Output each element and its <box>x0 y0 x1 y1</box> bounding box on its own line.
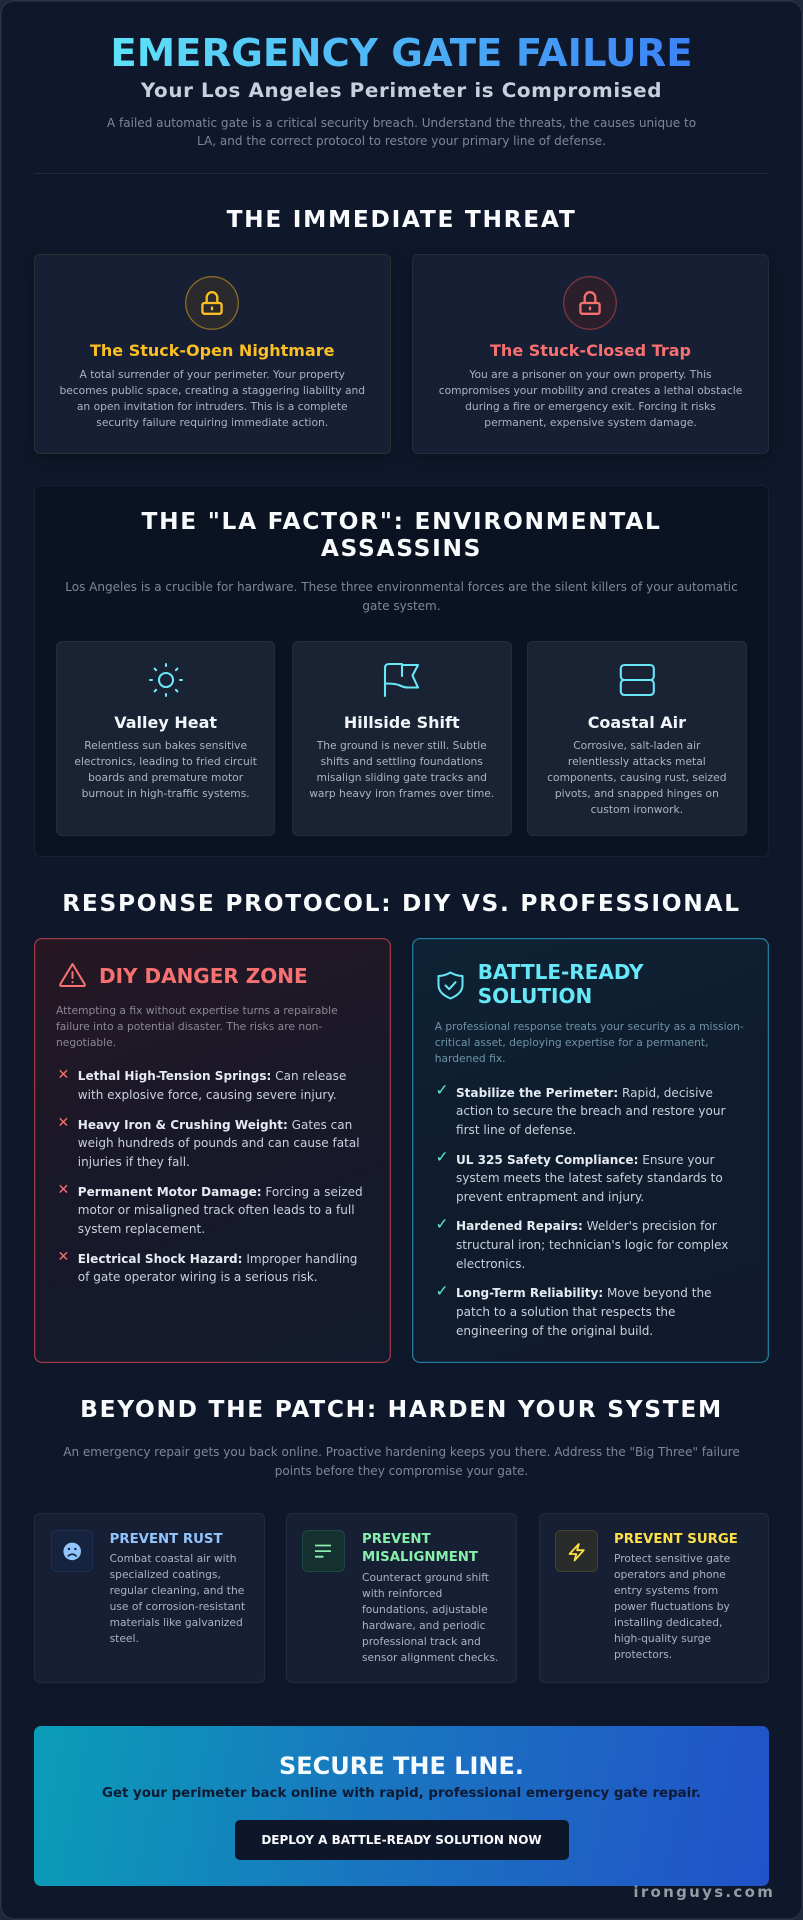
solution: stabilize: first line of defense. <box>456 1123 576 1137</box>
card body: becomes public space, creating a staggering liability and <box>59 384 365 397</box>
card body: materials like galvanized <box>110 1616 243 1629</box>
panel: call to action <box>34 1726 769 1886</box>
solution list: ✓ <box>436 1282 448 1300</box>
card body: relentlessly attacks metal <box>568 755 706 768</box>
card body <box>362 1571 498 1664</box>
section intro: An emergency repair gets you back online. Proactive hardening keeps you there. Address the "Big Three" failure <box>63 1445 740 1459</box>
card body: You are a prisoner on your own property. This <box>469 368 712 381</box>
heading: THE "LA FACTOR": ENVIRONMENTAL <box>141 508 662 535</box>
risk: motor: Permanent Motor Damage: Forcing a seized <box>78 1184 363 1198</box>
solution: reliability: Long-Term Reliability: Move beyond the <box>456 1286 712 1300</box>
section intro <box>63 1445 740 1478</box>
panel intro: negotiable. <box>56 1036 116 1049</box>
card body <box>309 739 494 800</box>
card body: regular cleaning, and the <box>110 1584 244 1597</box>
card title: The Stuck-Closed Trap <box>490 341 691 360</box>
icon: sun <box>149 663 183 697</box>
panel intro <box>56 1004 338 1049</box>
card body: foundations, adjustable <box>362 1603 488 1616</box>
panel intro: critical asset, deploying expertise for a permanent, <box>435 1036 708 1049</box>
card: coastal air <box>527 641 747 836</box>
card title: The Stuck-Open Nightmare <box>90 341 334 360</box>
card: valley heat <box>56 641 275 836</box>
subtitle: Your Los Angeles Perimeter is Compromised <box>141 79 662 102</box>
solution: ul 325 <box>456 1153 723 1204</box>
card body: during a fire or emergency exit. Forcing it risks <box>465 400 716 413</box>
section intro <box>65 580 738 613</box>
card body: protectors. <box>614 1648 672 1661</box>
risk list: ✕ <box>58 1182 69 1198</box>
card body: permanent, expensive system damage. <box>484 416 697 429</box>
solution: reliability: engineering of the original build. <box>456 1324 653 1338</box>
card body: Relentless sun bakes sensitive <box>84 739 247 752</box>
icon: frown face <box>51 1530 93 1572</box>
panel: stuck-open <box>34 254 390 454</box>
card body: burnout in high-traffic systems. <box>82 787 250 800</box>
card body: A total surrender of your perimeter. Your property <box>79 368 345 381</box>
panel: stuck-closed <box>412 254 769 454</box>
card: prevent misalignment <box>286 1513 517 1683</box>
risk list: ✕ <box>58 1067 69 1083</box>
watermark: ironguys.com <box>633 1883 775 1901</box>
heading: ASSASSINS <box>321 535 482 562</box>
risk: weight: injuries if they fall. <box>78 1155 190 1169</box>
heading: beyond the patch: BEYOND THE PATCH: HARDEN YOUR SYSTEM <box>80 1396 723 1422</box>
card body: electronics, leading to fried circuit <box>74 755 257 768</box>
risk list: ✕ <box>58 1115 69 1131</box>
solution: ul 325: prevent entrapment and injury. <box>456 1190 644 1204</box>
panel: la factor <box>34 485 769 857</box>
solution: ul 325: UL 325 Safety Compliance: Ensure your <box>456 1153 714 1167</box>
solution: stabilize <box>456 1086 726 1137</box>
icon: lightning bolt <box>555 1530 598 1572</box>
panel intro: Attempting a fix without expertise turns a repairable <box>56 1004 338 1017</box>
solution: hardened repairs <box>456 1219 728 1271</box>
icon: amber lock <box>185 276 239 330</box>
section intro: points before they compromise your gate. <box>275 1464 528 1478</box>
cta button: DEPLOY A BATTLE-READY SOLUTION NOW <box>261 1833 542 1847</box>
risk: springs <box>78 1069 346 1102</box>
icon: shield check <box>438 972 464 1000</box>
solution: stabilize: Stabilize the Perimeter: Rapid, decisive <box>456 1086 713 1100</box>
risk: weight <box>78 1118 360 1169</box>
risk: shock: of gate operator wiring is a serious risk. <box>78 1270 318 1284</box>
card body: hardware, and periodic <box>362 1619 486 1632</box>
panel intro: failure into a potential disaster. The risks are non- <box>56 1020 322 1033</box>
card title: MISALIGNMENT <box>362 1550 478 1565</box>
card title: Coastal Air <box>588 713 686 732</box>
risk: weight: Heavy Iron & Crushing Weight: Gates can <box>78 1118 352 1132</box>
card body: boards and premature motor <box>88 771 243 784</box>
intro text: A failed automatic gate is a critical security breach. Understand the threats, the causes unique to <box>107 116 696 130</box>
risk: motor: motor or misaligned track often leads to a full <box>78 1203 355 1217</box>
card title: PREVENT RUST <box>110 1532 223 1547</box>
card body: use of corrosion-resistant <box>110 1600 245 1613</box>
card title: Valley Heat <box>114 713 217 732</box>
card body: The ground is never still. Subtle <box>317 739 487 752</box>
panel intro: hardened fix. <box>435 1052 506 1065</box>
cta button <box>234 1820 568 1860</box>
panel title: DIY DANGER ZONE <box>99 964 308 988</box>
card body: an open invitation for intruders. This is a complete <box>77 400 348 413</box>
panel title: SOLUTION <box>478 984 592 1008</box>
solution: reliability: patch to a solution that respects the <box>456 1305 675 1319</box>
solution list: ✓ <box>436 1215 448 1233</box>
card title: PREVENT SURGE <box>614 1532 738 1547</box>
icon: warning triangle <box>59 963 86 987</box>
card body: misalign sliding gate tracks and <box>317 771 487 784</box>
solution: hardened repairs: structural iron; technician's logic for complex <box>456 1238 728 1252</box>
cta heading: SECURE THE LINE. <box>279 1752 524 1780</box>
title: EMERGENCY GATE FAILURE <box>110 31 693 76</box>
risk: weight: weigh hundreds of pounds and can cause fatal <box>78 1136 360 1150</box>
card body: sensor alignment checks. <box>362 1651 498 1664</box>
risk: shock: Electrical Shock Hazard: Improper handling <box>78 1252 357 1266</box>
risk: motor <box>78 1184 363 1236</box>
card body: steel. <box>110 1632 139 1645</box>
icon: stacked panels <box>620 664 655 696</box>
panel intro <box>434 1020 744 1065</box>
card body: high-quality surge <box>614 1632 711 1645</box>
intro text <box>107 116 696 148</box>
risk list: ✕ <box>58 1249 69 1265</box>
solution: reliability <box>456 1286 712 1338</box>
solution: ul 325: system meets the latest safety standards to <box>456 1171 723 1185</box>
card title <box>362 1532 478 1565</box>
card body <box>59 368 365 429</box>
card: prevent surge <box>539 1513 769 1683</box>
icon: align lines <box>302 1530 345 1572</box>
header <box>107 31 696 148</box>
panel title: BATTLE-READY <box>478 960 643 984</box>
heading: response protocol: RESPONSE PROTOCOL: DIY VS. PROFESSIONAL <box>62 890 741 917</box>
solution: stabilize: action to secure the breach and restore your <box>456 1104 726 1118</box>
card title: Hillside Shift <box>344 713 460 732</box>
card body: pivots, and snapped hinges on <box>555 787 719 800</box>
card body <box>74 739 257 800</box>
risk: springs: Lethal High-Tension Springs: Can release <box>78 1069 346 1083</box>
card body: professional track and <box>362 1635 481 1648</box>
heading <box>141 508 662 562</box>
card body: compromises your mobility and creates a lethal obstacle <box>439 384 742 397</box>
card: hillside shift <box>292 641 512 836</box>
card body: shifts and settling foundations <box>321 755 483 768</box>
solution list: ✓ <box>436 1148 448 1166</box>
icon: red lock <box>563 276 617 330</box>
card body: specialized coatings, <box>110 1568 221 1581</box>
risk: springs: with explosive force, causing severe injury. <box>78 1088 337 1102</box>
solution: hardened repairs: electronics. <box>456 1257 525 1271</box>
cta text: Get your perimeter back online with rapid, professional emergency gate repair. <box>102 1786 701 1801</box>
risk list <box>58 1067 363 1284</box>
section intro: Los Angeles is a crucible for hardware. These three environmental forces are the silent killers of your automatic <box>65 580 738 594</box>
card: prevent rust <box>34 1513 265 1683</box>
icon: flag <box>384 663 419 697</box>
panel title <box>478 960 644 1008</box>
card body: Protect sensitive gate <box>614 1552 730 1565</box>
solution list <box>436 1081 728 1338</box>
card body: operators and phone <box>614 1568 726 1581</box>
card body <box>439 368 742 429</box>
card body: warp heavy iron frames over time. <box>309 787 494 800</box>
heading: the immediate threat: THE IMMEDIATE THREAT <box>227 206 576 233</box>
panel: diy danger zone <box>34 938 390 1363</box>
panel intro: A professional response treats your security as a mission- <box>435 1020 744 1033</box>
card body: Corrosive, salt-laden air <box>573 739 700 752</box>
intro text: LA, and the correct protocol to restore your primary line of defense. <box>197 134 606 148</box>
card body: with reinforced <box>362 1587 442 1600</box>
card body: installing dedicated, <box>614 1616 722 1629</box>
card body: entry systems from <box>614 1584 718 1597</box>
card body: Combat coastal air with <box>110 1552 237 1565</box>
card body <box>614 1552 730 1661</box>
panel: battle-ready solution <box>412 938 769 1363</box>
card title: PREVENT <box>362 1532 431 1547</box>
risk: shock <box>78 1252 357 1284</box>
card body: Counteract ground shift <box>362 1571 489 1584</box>
section intro: gate system. <box>362 599 441 613</box>
card body <box>547 739 726 816</box>
solution list: ✓ <box>436 1081 448 1099</box>
card body: components, causing rust, seized <box>547 771 726 784</box>
card body: power fluctuations by <box>614 1600 730 1613</box>
card body: security failure requiring immediate action. <box>96 416 328 429</box>
card body <box>110 1552 245 1645</box>
solution: hardened repairs: Hardened Repairs: Welder's precision for <box>456 1219 717 1233</box>
risk: motor: system replacement. <box>78 1222 205 1236</box>
card body: custom ironwork. <box>591 803 683 816</box>
